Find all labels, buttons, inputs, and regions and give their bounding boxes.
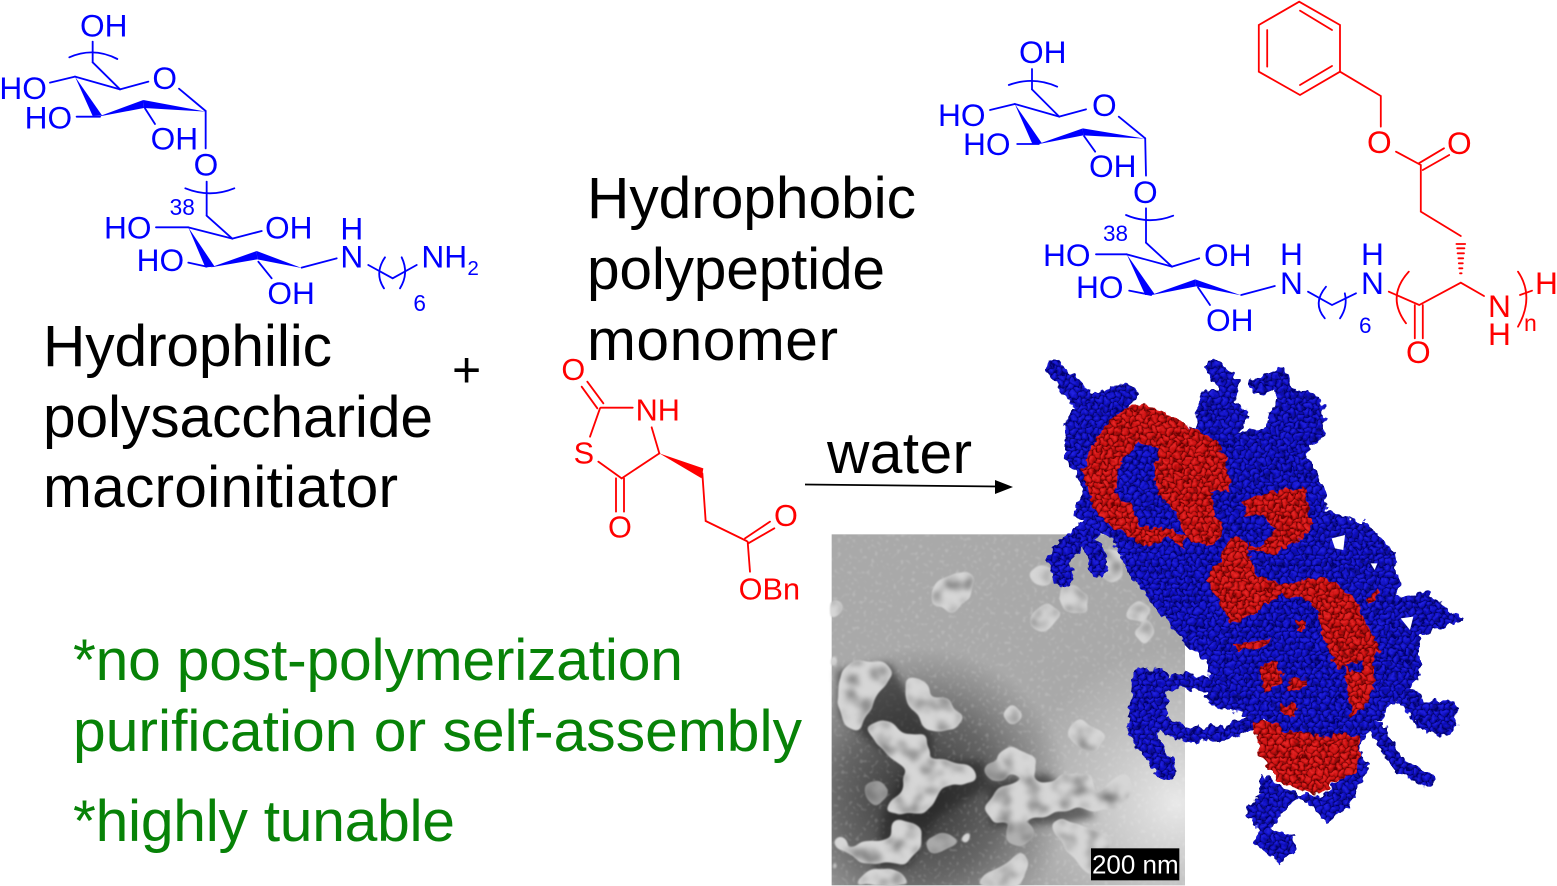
red core <box>1082 403 1380 795</box>
structure: hydrophilic polysaccharide macroinitiator: N <box>340 238 363 274</box>
polysaccharide block: OH <box>1204 237 1252 273</box>
polysaccharide block: OH <box>1019 34 1067 70</box>
green note: process benefits: *highly tunable <box>73 789 455 854</box>
structure: thiazolidinedione monomer <box>561 353 800 606</box>
structure: hydrophilic polysaccharide macroinitiator: OH <box>80 8 127 44</box>
polypeptide block: O <box>1367 124 1392 160</box>
reaction label: water: water <box>826 421 972 486</box>
label: hydrophobic polypeptide monomer: Hydrophobic <box>587 166 916 231</box>
polysaccharide block: 6 <box>1359 313 1372 338</box>
label: hydrophilic polysaccharide macroinitiator: Hydrophilic <box>43 314 332 379</box>
structure: thiazolidinedione monomer: O <box>774 499 798 533</box>
structure: hydrophilic polysaccharide macroinitiator: HO <box>25 99 72 135</box>
micelle model: red hydrophobic core with blue hydrophilic corona <box>1055 368 1463 863</box>
blue corona arms and body <box>1055 368 1463 863</box>
label: hydrophilic polysaccharide macroinitiator <box>43 314 433 520</box>
structure: hydrophilic polysaccharide macroinitiator <box>0 8 479 316</box>
structure: hydrophilic polysaccharide macroinitiator: H <box>340 210 363 246</box>
scale bar: 200 nm <box>1092 849 1179 879</box>
structure: hydrophilic polysaccharide macroinitiator: OH <box>151 120 198 156</box>
structure: hydrophilic polysaccharide macroinitiator: 2 <box>467 257 479 280</box>
polysaccharide block: OH <box>1089 148 1137 184</box>
structure: hydrophilic polysaccharide macroinitiator: NH <box>421 238 467 274</box>
structure: hydrophilic polysaccharide macroinitiator: O <box>152 60 177 96</box>
structure: hydrophilic polysaccharide macroinitiator: 6 <box>413 290 426 316</box>
polysaccharide block: N <box>1280 265 1303 301</box>
structure: hydrophilic polysaccharide macroinitiator: OH <box>265 210 312 246</box>
red patches within corona <box>1233 487 1378 717</box>
structure: thiazolidinedione monomer: O <box>561 353 585 387</box>
polysaccharide block: O <box>1133 174 1158 210</box>
structure: hydrophilic polysaccharide macroinitiator: HO <box>104 210 151 246</box>
blue chains over core <box>1113 437 1400 737</box>
polysaccharide block: HO <box>938 97 986 133</box>
label: hydrophilic polysaccharide macroinitiator: macroinitiator <box>43 455 398 520</box>
polysaccharide block: HO <box>1076 269 1124 305</box>
green note: process benefits <box>73 628 803 854</box>
white gaps in corona <box>1332 535 1413 630</box>
structure: polysaccharide-polypeptide block copolymer <box>938 2 1557 370</box>
label: hydrophobic polypeptide monomer: polypeptide <box>587 237 885 302</box>
label: hydrophilic polysaccharide macroinitiator: polysaccharide <box>43 385 433 450</box>
polypeptide block: H <box>1488 316 1511 352</box>
polysaccharide block: OH <box>1206 302 1254 338</box>
plus sign: + <box>452 342 481 398</box>
polysaccharide block: HO <box>1043 237 1091 273</box>
polysaccharide block: N <box>1361 265 1384 301</box>
polypeptide block: n <box>1524 310 1537 336</box>
polypeptide block: N <box>1488 288 1511 324</box>
arrow <box>805 480 1013 494</box>
structure: thiazolidinedione monomer: S <box>574 436 594 470</box>
structure: hydrophilic polysaccharide macroinitiator: HO <box>137 242 184 278</box>
polysaccharide block: 38 <box>1103 221 1128 246</box>
polysaccharide block: O <box>1092 87 1117 123</box>
structure: hydrophilic polysaccharide macroinitiator: HO <box>0 70 47 106</box>
TEM micrograph <box>830 534 1185 885</box>
structure: thiazolidinedione monomer: OBn <box>739 572 800 606</box>
polysaccharide block: H <box>1280 236 1303 272</box>
label: hydrophobic polypeptide monomer <box>587 166 916 373</box>
polysaccharide block <box>938 34 1384 338</box>
structure: hydrophilic polysaccharide macroinitiator: O <box>194 147 218 183</box>
polysaccharide block: HO <box>963 126 1011 162</box>
polypeptide block <box>1259 2 1557 370</box>
polysaccharide block: H <box>1361 236 1384 272</box>
structure: thiazolidinedione monomer: NH <box>636 394 680 428</box>
structure: hydrophilic polysaccharide macroinitiator: OH <box>267 275 315 311</box>
polypeptide block: O <box>1447 125 1472 161</box>
green note: process benefits: *no post-polymerization <box>73 628 683 693</box>
structure: thiazolidinedione monomer: O <box>608 510 632 544</box>
label: hydrophobic polypeptide monomer: monomer <box>587 308 838 373</box>
green note: process benefits: purification or self-assembly <box>73 699 803 764</box>
structure: hydrophilic polysaccharide macroinitiator: 38 <box>170 194 195 220</box>
TEM particles <box>830 550 1158 885</box>
polypeptide block: O <box>1406 334 1431 370</box>
